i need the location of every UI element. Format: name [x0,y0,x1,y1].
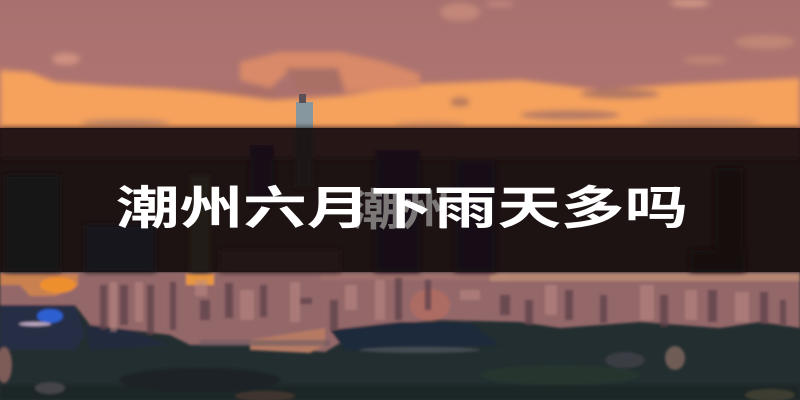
title: 潮州六月下雨天多吗 [116,183,688,234]
watermark text: 潮州 [351,186,451,235]
tower [296,94,313,130]
sky photo [0,0,800,130]
city and greenery photo [0,270,800,400]
building mosaic [100,278,786,335]
dark title band [0,128,800,272]
